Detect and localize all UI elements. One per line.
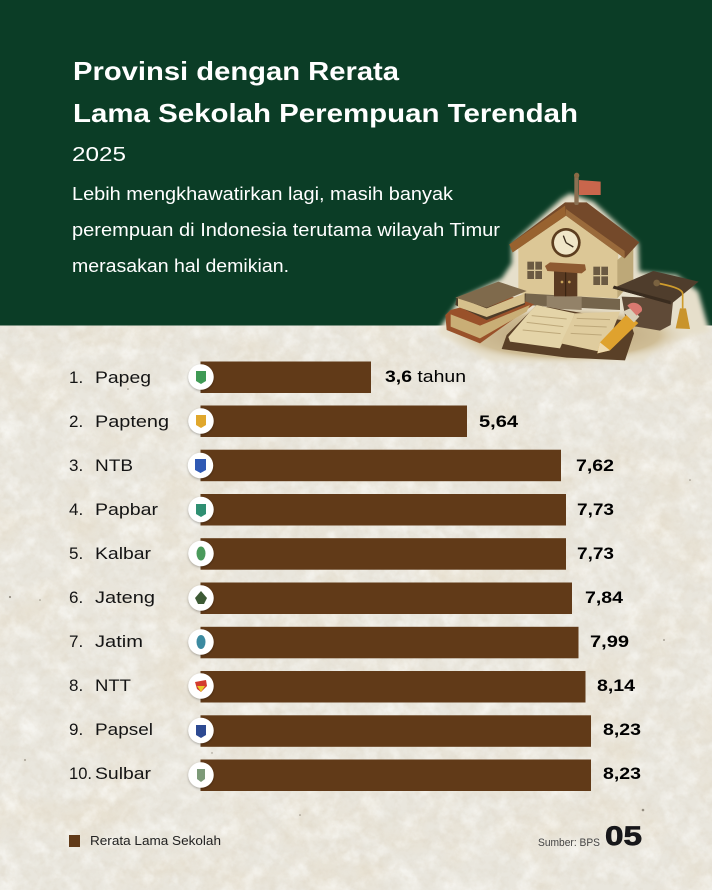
row 5: Kalbar: 5. (69, 544, 83, 563)
row 9: Papsel: 8,23 (603, 720, 641, 739)
row 9: Papsel (69, 715, 641, 747)
clock (551, 228, 581, 257)
row 10: Sulbar: Sulbar (95, 764, 151, 783)
bar chart (69, 362, 641, 791)
row 1: Papeg: Papeg (95, 368, 151, 387)
row 3: NTB: 7,62 (576, 456, 614, 475)
source: Sumber: BPS (538, 837, 600, 849)
door (554, 271, 577, 296)
row 10: Sulbar: 8,23 (603, 764, 641, 783)
title (73, 56, 578, 128)
row 9: Papsel: Papsel (95, 720, 153, 739)
row 8: NTT: NTT (95, 676, 131, 695)
torn paper halo (437, 193, 710, 362)
row 8: NTT: 8. (69, 676, 83, 695)
row 6: Jateng: 6. (69, 588, 83, 607)
row 1: Papeg (69, 362, 466, 393)
row 5: Kalbar: 7,73 (577, 544, 614, 563)
row 5: Kalbar: Kalbar (95, 544, 151, 563)
row 10: Sulbar (69, 760, 641, 791)
row 3: NTB (69, 450, 614, 481)
description text: merasakan hal demikian. (72, 256, 289, 276)
sand ground (443, 306, 690, 364)
foundation (525, 293, 620, 310)
tassel (676, 308, 690, 329)
row 9: Papsel: 9. (69, 720, 83, 739)
row 7: Jatim: Jatim (95, 632, 143, 651)
row 1: Papeg: 1. (69, 368, 83, 387)
page number: 05 (605, 821, 642, 851)
lower book (445, 295, 534, 343)
green header panel (0, 0, 712, 326)
row 1: Papeg: 3,6 tahun (385, 367, 466, 386)
year: 2025 (72, 144, 126, 166)
illustration: school house, books, graduation cap and pencil (437, 173, 710, 364)
row 2: Papteng: 2. (69, 412, 83, 431)
book stack (445, 282, 534, 343)
title: Lama Sekolah Perempuan Terendah (73, 98, 578, 128)
row 2: Papteng: 5,64 (479, 412, 519, 431)
row 8: NTT (69, 671, 636, 702)
legend: Rerata Lama Sekolah (90, 833, 221, 848)
roof (509, 202, 639, 258)
title: Provinsi dengan Rerata (73, 56, 400, 86)
pencil (597, 314, 638, 353)
row 4: Papbar (69, 494, 614, 526)
row 7: Jatim: 7. (69, 632, 83, 651)
row 6: Jateng (69, 582, 624, 614)
row 7: Jatim: 7,99 (590, 632, 629, 651)
description text: Lebih mengkhawatirkan lagi, masih banyak (72, 184, 454, 204)
row 5: Kalbar (69, 538, 614, 570)
row 4: Papbar: 7,73 (577, 500, 614, 519)
paper background (0, 320, 712, 890)
row 3: NTB: NTB (95, 456, 133, 475)
windows (527, 262, 542, 279)
row 6: Jateng: 7,84 (585, 588, 624, 607)
row 6: Jateng: Jateng (95, 588, 155, 607)
house walls (518, 215, 618, 298)
description text: perempuan di Indonesia terutama wilayah Timur (72, 220, 500, 240)
flag (579, 180, 601, 195)
row 4: Papbar: Papbar (95, 500, 158, 519)
graduation cap (622, 297, 673, 331)
row 4: Papbar: 4. (69, 500, 83, 519)
open book (502, 305, 634, 360)
description text (72, 184, 500, 276)
flagpole (574, 175, 579, 205)
row 2: Papteng: Papteng (95, 412, 169, 431)
row 8: NTT: 8,14 (597, 676, 636, 695)
row 10: Sulbar: 10. (69, 764, 92, 783)
row 2: Papteng (69, 406, 519, 437)
upper book (455, 293, 526, 320)
row 3: NTB: 3. (69, 456, 83, 475)
row 7: Jatim (69, 627, 629, 658)
